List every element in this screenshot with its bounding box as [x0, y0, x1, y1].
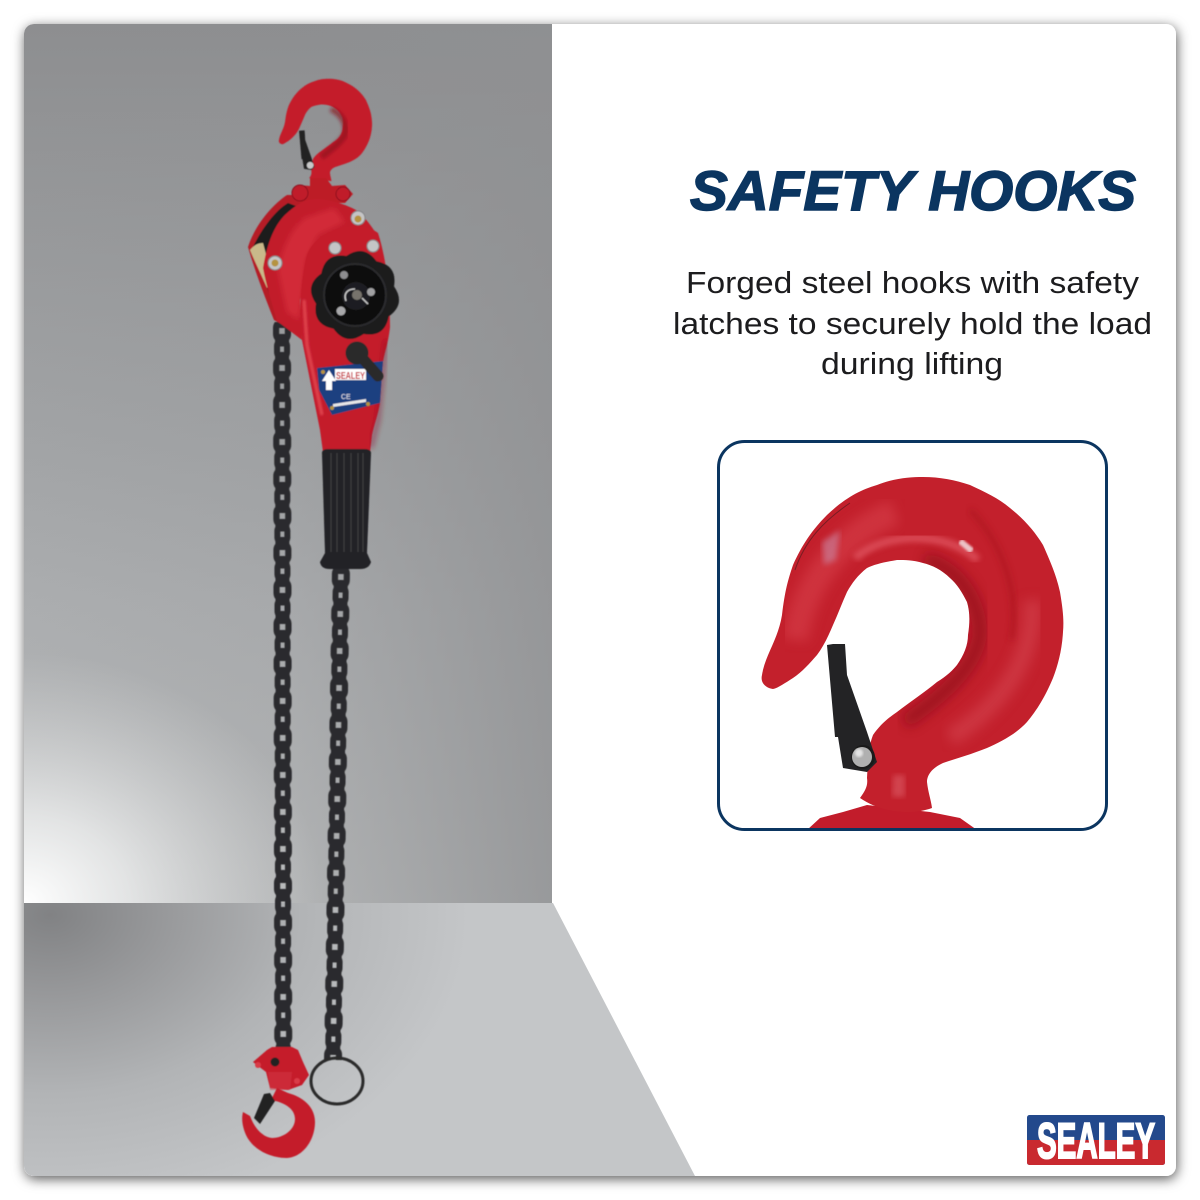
rubber handle [320, 449, 371, 569]
title: SAFETY HOOKS [690, 159, 1136, 222]
data plate: SEALEY [336, 371, 365, 382]
product: lever hoist [242, 79, 399, 1158]
hand chain right [323, 568, 351, 1060]
panel: product photo backdrop [24, 24, 695, 1176]
hoist body [263, 199, 390, 452]
description text: latches to securely hold the load [673, 306, 1152, 341]
bottom hook block [253, 1047, 309, 1090]
loose chain left [272, 322, 293, 1050]
top hook [279, 79, 372, 181]
data plate: CE [341, 394, 351, 401]
description text: during lifting [821, 346, 1003, 381]
bolts [268, 211, 379, 270]
safety latch [827, 644, 877, 772]
description text [673, 265, 1152, 381]
lever knob [346, 342, 378, 376]
data plate [317, 361, 383, 415]
pull ring [311, 1058, 363, 1104]
inset: hook close-up [718, 442, 1106, 830]
hoist base [809, 805, 974, 828]
big hook [762, 477, 1063, 812]
black wheel knob [311, 251, 399, 339]
swivel block [292, 178, 353, 203]
description text: Forged steel hooks with safety [686, 265, 1140, 300]
bottom hook [242, 1088, 315, 1158]
back plate [248, 195, 308, 325]
